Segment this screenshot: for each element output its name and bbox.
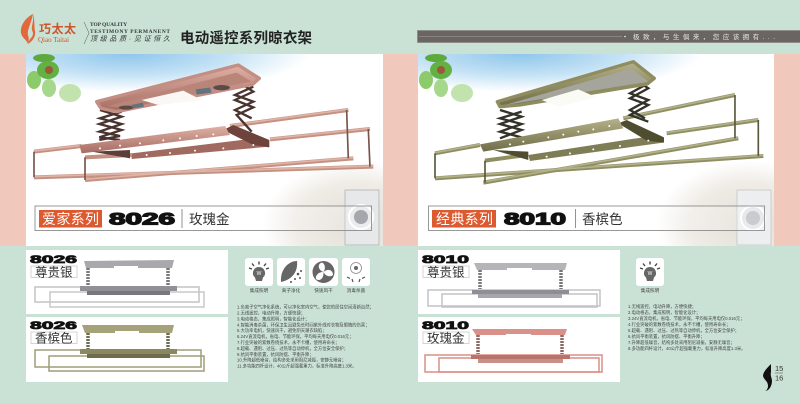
logo	[21, 14, 170, 44]
card: 8010 silver	[418, 250, 620, 314]
logo: 巧太太	[39, 21, 77, 36]
panel: hero 8026 rose gold	[26, 54, 383, 246]
sky	[26, 54, 316, 114]
feature list: 8026: 8.超载、遇阻、过压、过热等自动停机，全方位安全保护；	[237, 345, 348, 352]
product label bar: 玫瑰金	[189, 212, 230, 227]
card: 8026 champagne: 8026	[30, 320, 77, 332]
feature list: 8026: 7.行业突破的紫数卷绕技术，永不卡槽，使用寿命长；	[237, 339, 339, 346]
feature list: 8010: 7.升降超低噪音，结构多处采用阻尼减振，安静无噪音；	[628, 339, 735, 346]
icon label: 集成照明	[641, 287, 660, 294]
feature list: 8010: 1.无线遥控，电动升降，方便快捷；	[628, 303, 696, 310]
product label bar: 经典系列	[436, 211, 493, 227]
product label bar: 8010	[504, 210, 566, 228]
icon: integrated lighting	[245, 258, 273, 286]
icon: fast air drying	[309, 258, 338, 286]
logo: Qiao Taitai	[38, 36, 69, 44]
icon: ion purification	[277, 258, 305, 286]
product label bar	[428, 206, 764, 230]
logo: TOP QUALITY	[90, 22, 127, 28]
icon: integrated lighting: W	[257, 271, 262, 277]
page number with silhouette: 15	[775, 364, 783, 373]
feature list: 8010: 4.行业突破的紫数卷绕技术，永不卡槽，使用寿命长；	[628, 321, 730, 328]
card: 8010 silver: 8010	[422, 254, 469, 266]
title: 电动遥控系列晾衣架	[180, 29, 312, 47]
feature list: 8010	[628, 303, 745, 352]
logo: 顶级品质·见证恒久	[90, 35, 170, 43]
panel: hero 8010 champagne	[418, 54, 774, 246]
drying rack	[34, 65, 373, 180]
card: 8026 champagne	[26, 317, 228, 382]
feature list: 8010: 6.抗风平衡装置，抗风防摆、平衡升降；	[628, 333, 705, 340]
washing machine	[737, 190, 771, 245]
icon: integrated lighting	[636, 258, 664, 286]
page number with silhouette	[763, 364, 783, 391]
feature list: 8010: 3.24V直流电机，省电、节能环保，平均每天用电仅0.016元；	[628, 315, 745, 322]
card: 8026 champagne: 香槟色	[35, 330, 73, 345]
page number with silhouette: 16	[775, 374, 783, 382]
card: 8010 silver: 尊贵银	[427, 264, 465, 279]
feature list: 8010: 5.超载、遇阻、过压、过热等自动停机，全方位安全保护；	[628, 327, 739, 334]
icon label: 集成照明	[250, 287, 269, 294]
card: 8010 rose gold	[418, 317, 620, 382]
product label bar: 8026	[109, 210, 175, 228]
icon label: 消毒杀菌	[347, 287, 366, 294]
product label bar: 爱家系列	[42, 211, 99, 227]
washing machine	[345, 190, 379, 245]
feature list: 8026: 6.24V直流电机，省电、节能环保，平均每天用电仅0.016元；	[237, 333, 354, 340]
icon: integrated lighting: W	[648, 271, 653, 277]
feature list: 8010: 8.多功能四杆设计，40公斤超强載重力，标准升降高度1.3米。	[628, 345, 745, 352]
product label bar: 香槟色	[582, 211, 622, 227]
card: 8026 silver: 8026	[30, 254, 77, 266]
icon label: 快速风干	[314, 287, 333, 294]
icon: sterilization	[342, 258, 370, 286]
leaves	[419, 54, 473, 102]
card: 8010 rose gold: 8010	[422, 320, 469, 332]
pink band	[0, 54, 800, 246]
leaves	[27, 54, 81, 102]
room background	[255, 160, 383, 246]
feature list: 8026: 1.负离子空气净化系统，可以净化室内空气，使您的居住空间清新自然；	[237, 304, 374, 310]
sky	[418, 54, 708, 114]
logo: TESTIMONY PERMANENT	[90, 29, 170, 35]
feature list: 8026: 4.智能消毒杀菌，环保卫生且避免长时间紫外线对衣物及眼睛的伤害；	[237, 321, 370, 328]
card: 8026 silver: 尊贵银	[35, 264, 73, 279]
feature list: 8026	[237, 304, 374, 370]
drying rack	[435, 62, 763, 183]
feature list: 8026: 5.大功率电机，快速风干，避免阴天潮衣缺陷；	[237, 327, 327, 334]
product label bar	[35, 206, 372, 230]
feature list: 8026: 9.抗风平衡装置，抗风防摆、平衡升降；	[237, 351, 314, 358]
slogan bar: 极致，与生俱来，您应该拥有...	[633, 32, 775, 41]
feature list: 8026: 3.电动格态，集成照明，智能化设计；	[237, 315, 309, 322]
feature list: 8026: 11.多功能四杆设计，40公斤超强載重力，标准升降高度1.3米。	[237, 363, 357, 370]
slogan bar	[418, 30, 800, 42]
icon label: 离子净化	[282, 287, 301, 294]
card: 8026 silver	[26, 250, 228, 314]
feature list: 8010: 2.电动格态，集成照明，智能化设计；	[628, 309, 700, 316]
feature list: 8026: 10.升降超低噪音，结构多处采用阻尼减振，安静无噪音；	[237, 357, 346, 364]
feature list: 8026: 2.无线遥控，电动升降，方便快捷；	[237, 310, 305, 316]
card: 8010 rose gold: 玫瑰金	[427, 330, 465, 345]
room background	[650, 160, 774, 246]
